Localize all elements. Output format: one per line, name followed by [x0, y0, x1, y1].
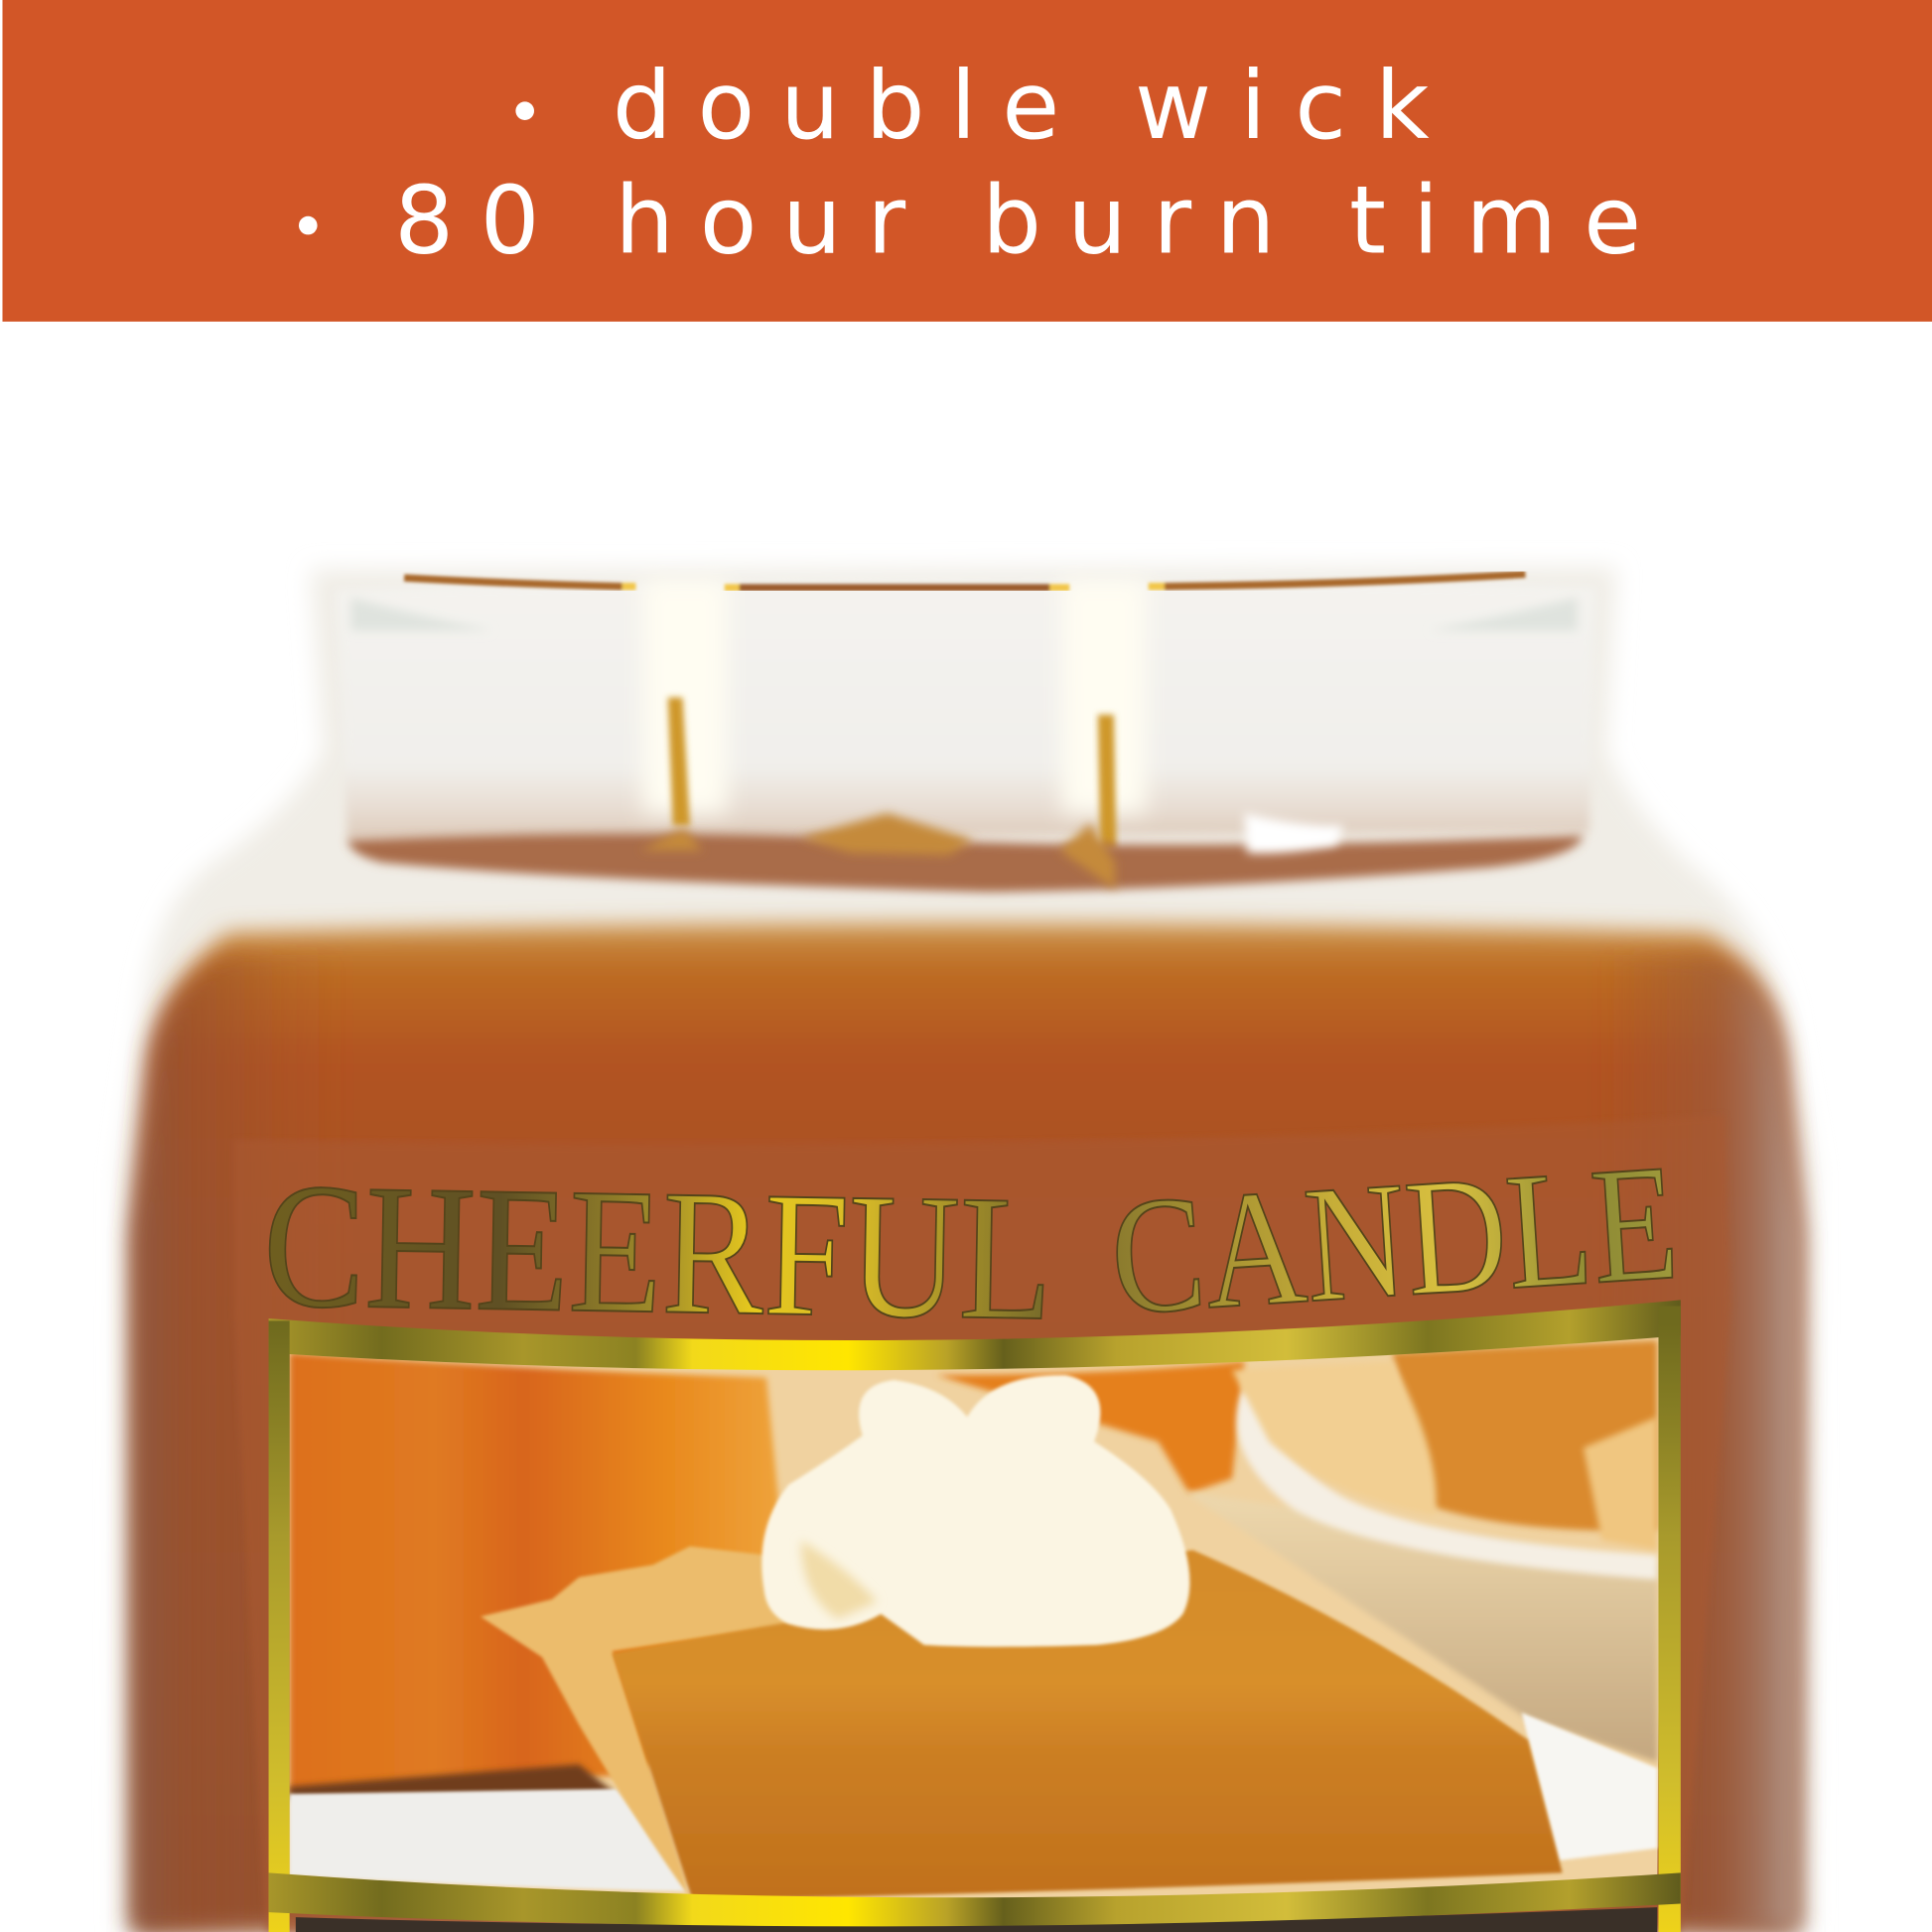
- white plate left: [290, 1789, 690, 1891]
- back pie crust: [1232, 1361, 1437, 1516]
- line: 80 hour burn time: [299, 166, 1641, 275]
- flame glow bands: [643, 579, 1146, 813]
- pie slice: [613, 1550, 1563, 1900]
- brand name: [262, 1130, 1683, 1358]
- line: double wick: double: [613, 52, 1059, 161]
- wax drip left: [640, 828, 702, 850]
- line: double wick: wick: [1135, 52, 1430, 161]
- wax drip right: [1059, 823, 1115, 890]
- wax edge shading: [133, 955, 1801, 1932]
- molten wax pool: [347, 834, 1584, 893]
- glass neck: [336, 579, 1596, 840]
- frame bottom: [269, 1872, 1681, 1926]
- pumpkin: [290, 1353, 788, 1793]
- table: [1182, 1491, 1657, 1762]
- frame left: [269, 1320, 290, 1932]
- header banner: [2, 0, 1932, 322]
- photo background: [290, 1335, 1661, 1909]
- wax body: [133, 923, 1801, 1932]
- wick left: [668, 697, 690, 826]
- candle jar: [118, 567, 1814, 1932]
- gold frame: [269, 1300, 1681, 1932]
- back pie plate: [1237, 1392, 1657, 1580]
- line: 80 hour burn time: time: [1349, 166, 1641, 275]
- label photo: [290, 1335, 1661, 1909]
- dark lower panel: [296, 1907, 1657, 1932]
- back pie crust edge: [1584, 1417, 1657, 1550]
- glass highlight: [1244, 813, 1343, 853]
- glass silhouette: [118, 567, 1814, 1932]
- shadow under pumpkin: [290, 1764, 617, 1799]
- line: 80 hour burn time: 80: [394, 166, 540, 275]
- pie crust: [481, 1547, 863, 1897]
- line: 80 hour burn time: hour: [615, 166, 905, 275]
- background pumpkin: [936, 1361, 1244, 1493]
- rim shading: [351, 598, 1578, 630]
- line: double wick: [515, 52, 1430, 161]
- line: 80 hour burn time: burn: [982, 166, 1276, 275]
- white plate right: [1522, 1713, 1657, 1861]
- wick right: [1098, 715, 1116, 850]
- wax drip centre: [801, 813, 973, 855]
- frame right: [1658, 1307, 1681, 1932]
- cream shadow: [801, 1540, 878, 1619]
- back pie filling: [1392, 1340, 1657, 1531]
- whipped cream: [761, 1375, 1189, 1647]
- label backing: [234, 1115, 1731, 1932]
- word: CHEERFUL: CHEERFUL: [262, 1147, 1054, 1358]
- word: CANDLE: CANDLE: [1106, 1130, 1683, 1350]
- rim wax line: [404, 574, 1525, 588]
- frame top: [269, 1300, 1681, 1370]
